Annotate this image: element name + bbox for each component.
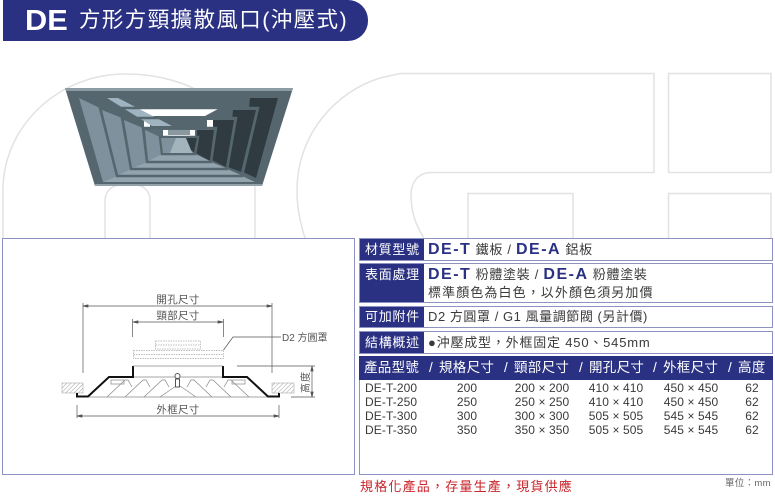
table header: 高度 bbox=[738, 360, 766, 375]
label: construction: 結構概述 bbox=[365, 335, 420, 350]
dimension: height bbox=[237, 366, 315, 397]
black diffuser profile bbox=[77, 366, 279, 396]
value: surface finish: DE-T 粉體塗裝 / DE-A 粉體塗裝 bbox=[428, 266, 648, 283]
table row: DE-T-350: 62 bbox=[745, 423, 759, 437]
table row: DE-T-300: 545 × 545 bbox=[664, 409, 718, 423]
label: surface finish: 表面處理 bbox=[365, 267, 420, 282]
section drawing of diffuser bbox=[62, 293, 328, 418]
leader to D2 label bbox=[224, 337, 281, 350]
table header: 頸部尺寸 bbox=[514, 360, 569, 375]
table row: DE-T-350: 350 bbox=[457, 423, 477, 437]
innermost core bbox=[161, 138, 197, 153]
specification table bbox=[359, 356, 773, 475]
title banner bbox=[3, 0, 368, 41]
footer note: stock supply: 規格化產品，存量生產，現貨供應 bbox=[360, 479, 573, 494]
table row: DE-T-350: 350 × 350 bbox=[515, 423, 569, 437]
table header: 規格尺寸 bbox=[439, 360, 494, 375]
table header: 產品型號 bbox=[364, 360, 419, 375]
table row: DE-T-350: 505 × 505 bbox=[589, 423, 643, 437]
table row: DE-T-200: 450 × 450 bbox=[664, 381, 718, 395]
model code DE: DE bbox=[25, 4, 68, 36]
note: standard colour: 標準顏色為白色，以外顏色須另加價 bbox=[428, 285, 654, 300]
dimension: opening size bbox=[83, 303, 272, 373]
label: outer frame size: 外框尺寸 bbox=[156, 403, 200, 416]
table row: DE-T-200: 410 × 410 bbox=[589, 381, 643, 395]
table header: / bbox=[653, 360, 657, 375]
table row: DE-T-300 bbox=[365, 409, 759, 423]
table row: DE-T-250: 450 × 450 bbox=[664, 395, 718, 409]
table row: DE-T-250: DE-T-250 bbox=[365, 395, 417, 409]
table header: 外框尺寸 bbox=[663, 360, 718, 375]
table row: DE-T-300: 505 × 505 bbox=[589, 409, 643, 423]
table row: DE-T-250 bbox=[365, 395, 759, 409]
blades bbox=[77, 377, 279, 397]
label: D2 round cover: D2 方圓罩 bbox=[282, 331, 328, 344]
row: surface finish bbox=[359, 263, 773, 303]
nested frame outlines bbox=[100, 108, 258, 176]
dimension: neck size bbox=[132, 319, 224, 337]
white see-through openings bbox=[133, 109, 218, 116]
table header: 開孔尺寸 bbox=[589, 360, 644, 375]
label: material bbox=[360, 239, 424, 260]
row: material bbox=[359, 238, 773, 261]
row: accessories bbox=[359, 306, 773, 328]
label: neck size: 頸部尺寸 bbox=[156, 309, 200, 322]
table row: DE-T-300: 300 × 300 bbox=[515, 409, 569, 423]
table header: / bbox=[429, 360, 433, 375]
table header bbox=[359, 356, 773, 380]
label: material: 材質型號 bbox=[365, 242, 420, 257]
value: construction: ●沖壓成型，外框固定 450、545mm bbox=[428, 335, 651, 350]
label: accessories bbox=[360, 307, 424, 327]
light vane strip bbox=[107, 98, 172, 126]
table row: DE-T-250: 250 × 250 bbox=[515, 395, 569, 409]
product image: square ceiling diffuser bbox=[65, 88, 293, 186]
dimension: outer frame bbox=[77, 405, 279, 418]
table row: DE-T-300: DE-T-300 bbox=[365, 409, 417, 423]
table row: DE-T-350 bbox=[365, 423, 759, 437]
accessory D2 dashed outline bbox=[134, 341, 224, 358]
value: material: DE-T 鐵板 / DE-A 鋁板 bbox=[428, 241, 593, 258]
table row: DE-T-250: 410 × 410 bbox=[589, 395, 643, 409]
label: construction bbox=[360, 332, 424, 353]
row: construction bbox=[359, 331, 773, 354]
table row: DE-T-350: DE-T-350 bbox=[365, 423, 417, 437]
level 3 walls bbox=[145, 130, 162, 161]
level 1 walls bbox=[102, 110, 131, 175]
table row: DE-T-200: 200 bbox=[457, 381, 477, 395]
table header: / bbox=[504, 360, 508, 375]
wall hatch bbox=[62, 383, 294, 393]
unit note: 單位：mm bbox=[725, 478, 771, 489]
table row: DE-T-300: 300 bbox=[457, 409, 477, 423]
table header: / bbox=[728, 360, 732, 375]
level 0 walls bbox=[79, 98, 117, 182]
label: accessories: 可加附件 bbox=[365, 309, 420, 324]
label: opening size: 開孔尺寸 bbox=[156, 293, 200, 306]
table row: DE-T-200: 200 × 200 bbox=[515, 381, 569, 395]
table row: DE-T-350: 545 × 545 bbox=[664, 423, 718, 437]
value: accessories: D2 方圓罩 / G1 風量調節閥 (另計價) bbox=[428, 309, 648, 324]
panel: section drawing bbox=[2, 238, 355, 475]
level 2 walls bbox=[124, 120, 147, 168]
label: height: 高度 bbox=[299, 371, 312, 393]
table row: DE-T-300: 62 bbox=[745, 409, 759, 423]
table row: DE-T-200: DE-T-200 bbox=[365, 381, 417, 395]
label: surface finish bbox=[360, 264, 424, 302]
table row: DE-T-250: 250 bbox=[457, 395, 477, 409]
outer frame bbox=[65, 88, 293, 186]
product title: 方形方頸擴散風口(沖壓式) bbox=[79, 8, 348, 32]
centre bolt bbox=[175, 374, 180, 387]
table row: DE-T-200: 62 bbox=[745, 381, 759, 395]
table row: DE-T-250: 62 bbox=[745, 395, 759, 409]
table header: / bbox=[579, 360, 583, 375]
table row: DE-T-200 bbox=[365, 381, 759, 395]
